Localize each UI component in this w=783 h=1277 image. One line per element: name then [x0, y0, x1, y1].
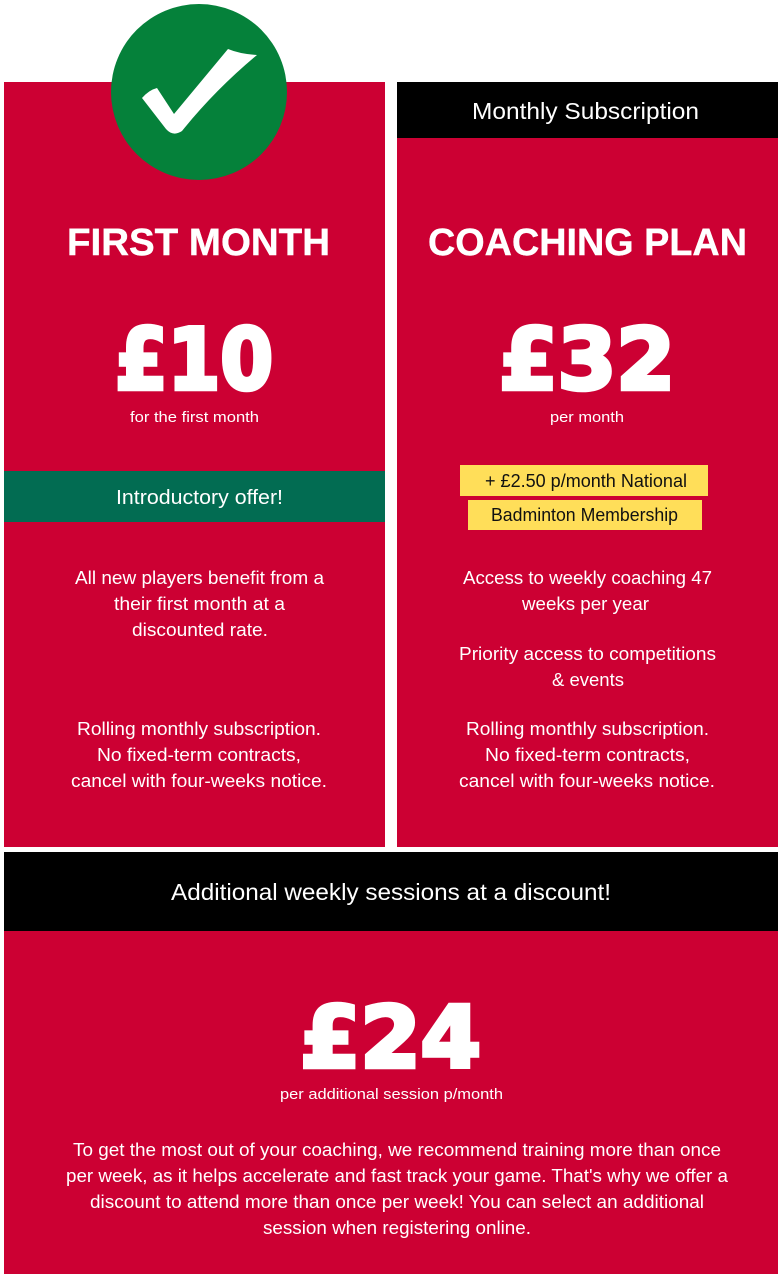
callout: national badminton membership: [460, 465, 708, 530]
panel: first month: [4, 4, 385, 847]
callout: national badminton membership: + £2.50 p/month National: [485, 471, 687, 491]
heading: coaching plan: COACHING PLAN: [428, 222, 747, 264]
text: rolling subscription terms: Rolling monthly subscription.: [466, 719, 709, 739]
text: priority access: & events: [552, 670, 624, 690]
price: £32: £32: [499, 311, 675, 410]
text: new player discount: All new players benefit from a: [75, 568, 325, 588]
text: new player discount: their first month at a: [114, 594, 286, 614]
text: additional session explanation: [66, 1140, 729, 1238]
text: rolling subscription terms: Rolling monthly subscription.: [77, 719, 321, 739]
text: rolling subscription terms: cancel with four-weeks notice.: [71, 771, 327, 791]
text: rolling subscription terms: No fixed-term contracts,: [97, 745, 301, 765]
header: additional sessions: [4, 852, 778, 931]
banner: introductory offer: [4, 471, 385, 522]
text: weekly coaching: weeks per year: [521, 594, 649, 614]
price: £24: £24: [300, 989, 481, 1088]
price caption: for the first month: [130, 409, 259, 426]
text: weekly coaching: [463, 568, 712, 614]
header: additional sessions: Additional weekly sessions at a discount!: [171, 879, 611, 905]
text: weekly coaching: Access to weekly coaching 47: [463, 568, 712, 588]
panel: coaching plan: [397, 82, 778, 847]
text: additional session explanation: per week, as it helps accelerate and fast track your game. That's why we offer a: [66, 1166, 729, 1186]
text: rolling subscription terms: cancel with four-weeks notice.: [459, 771, 715, 791]
text: rolling subscription terms: [71, 719, 327, 791]
banner: introductory offer: Introductory offer!: [116, 487, 283, 509]
heading: first month: FIRST MONTH: [67, 222, 330, 264]
text: rolling subscription terms: [459, 719, 715, 791]
callout: national badminton membership: Badminton Membership: [491, 505, 678, 525]
price caption: per additional session p/month: [280, 1086, 503, 1103]
header: monthly subscription: [397, 82, 778, 138]
text: additional session explanation: session when registering online.: [263, 1218, 531, 1238]
panel: additional sessions: [4, 852, 778, 1274]
header: monthly subscription: Monthly Subscription: [472, 98, 699, 124]
text: priority access: Priority access to competitions: [459, 644, 716, 664]
text: additional session explanation: discount to attend more than once per week! You can select an additional: [90, 1192, 704, 1212]
text: new player discount: discounted rate.: [132, 620, 268, 640]
price: £10: £10: [115, 311, 273, 410]
text: priority access: [459, 644, 716, 690]
text: rolling subscription terms: No fixed-term contracts,: [485, 745, 690, 765]
text: new player discount: [75, 568, 325, 640]
text: additional session explanation: To get the most out of your coaching, we recommend training more than once: [73, 1140, 721, 1160]
icon: green check badge: [111, 4, 287, 180]
price caption: per month: [550, 409, 624, 426]
